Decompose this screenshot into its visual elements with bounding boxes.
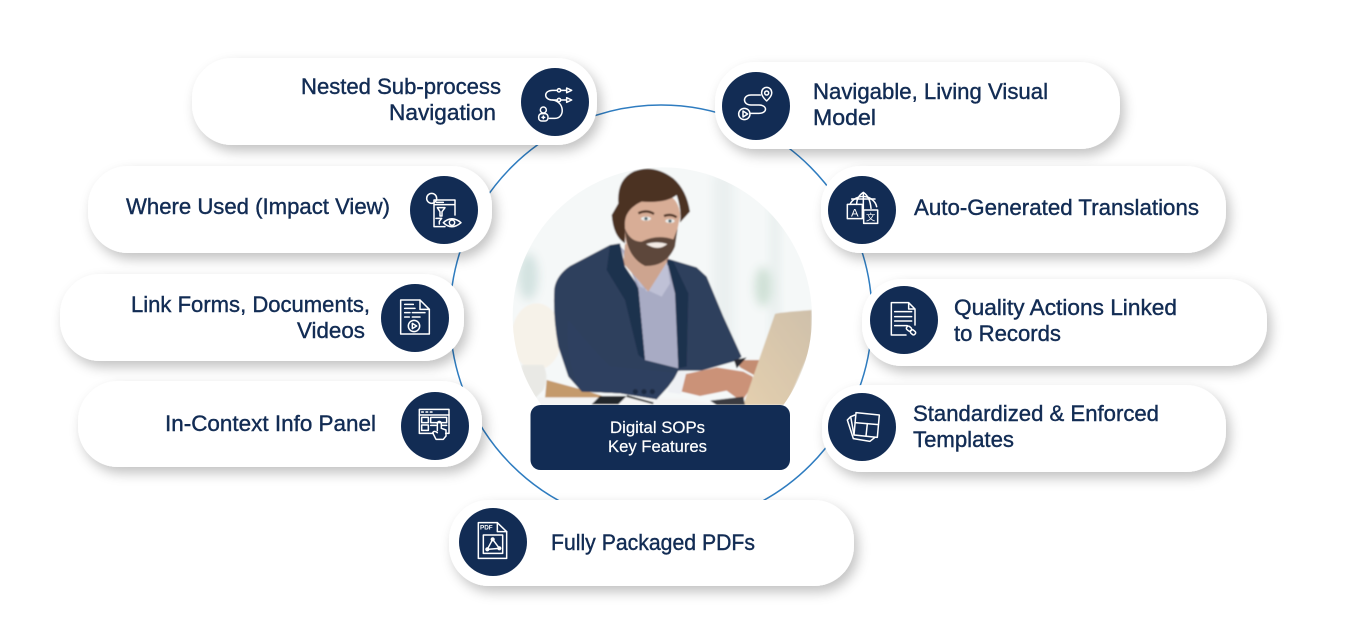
panel: Standardized & Enforced Templates: Standardized & Enforced (913, 401, 1159, 426)
panel: Nested Sub-process Navigation: Nested Sub-process (301, 74, 501, 99)
panel: In-Context Info Panel: In-Context Info Panel (165, 411, 376, 436)
panel: Quality Actions Linked to Records: to Records (954, 321, 1061, 346)
panel: Link Forms, Documents, Videos (60, 274, 464, 361)
panel: Standardized & Enforced Templates: Templates (913, 427, 1014, 452)
icon: interface with pointing hand (419, 409, 449, 439)
panel: Quality Actions Linked to Records (862, 279, 1267, 366)
panel: Link Forms, Documents, Videos: Videos (297, 318, 365, 343)
icon: globe with translation cards (847, 192, 878, 224)
panel: Quality Actions Linked to Records: Quality Actions Linked (954, 295, 1177, 320)
panel: Auto-Generated Translations: Auto-Generated Translations (914, 195, 1199, 220)
icon: document with play button (401, 300, 429, 334)
panel: Link Forms, Documents, Videos: Link Forms, Documents, (131, 292, 370, 317)
icon: globe with translation cards: A (851, 207, 859, 219)
icon: PDF document (478, 523, 507, 558)
central photo: businessman at laptop (510, 160, 820, 407)
central title label: Digital SOPs (610, 419, 705, 437)
icon: globe with translation cards: 文 (866, 210, 875, 224)
infographic: Digital SOPs key features (58, 58, 1278, 598)
panel: Navigable, Living Visual Model: Model (813, 105, 876, 130)
panel: Fully Packaged PDFs (449, 500, 854, 586)
connecting ring (450, 105, 872, 527)
panel: Auto-Generated Translations (821, 166, 1226, 253)
icon: PDF document: PDF (480, 524, 493, 531)
panel: Navigable, Living Visual Model: Navigable, Living Visual (813, 79, 1048, 104)
panel: Nested Sub-process Navigation: Navigation (389, 100, 496, 125)
panel: Fully Packaged PDFs: Fully Packaged PDFs (551, 530, 755, 555)
panel: Where Used (Impact View): Where Used (Impact View) (126, 194, 390, 219)
panel: In-Context Info Panel (78, 381, 482, 467)
icon: stacked templates (847, 413, 879, 441)
panel: Nested Sub-process Navigation (192, 58, 597, 145)
icon: route from play to pin (739, 87, 772, 120)
icon: window with eye (427, 193, 461, 227)
icon: branching path with arrows (539, 88, 572, 121)
central title label: Key Features (608, 438, 707, 456)
icon: document with link (891, 303, 916, 336)
panel: Navigable, Living Visual Model (715, 62, 1120, 149)
panel: Where Used (Impact View) (88, 166, 492, 253)
central title label (530, 405, 790, 470)
panel: Standardized & Enforced Templates (822, 385, 1226, 472)
